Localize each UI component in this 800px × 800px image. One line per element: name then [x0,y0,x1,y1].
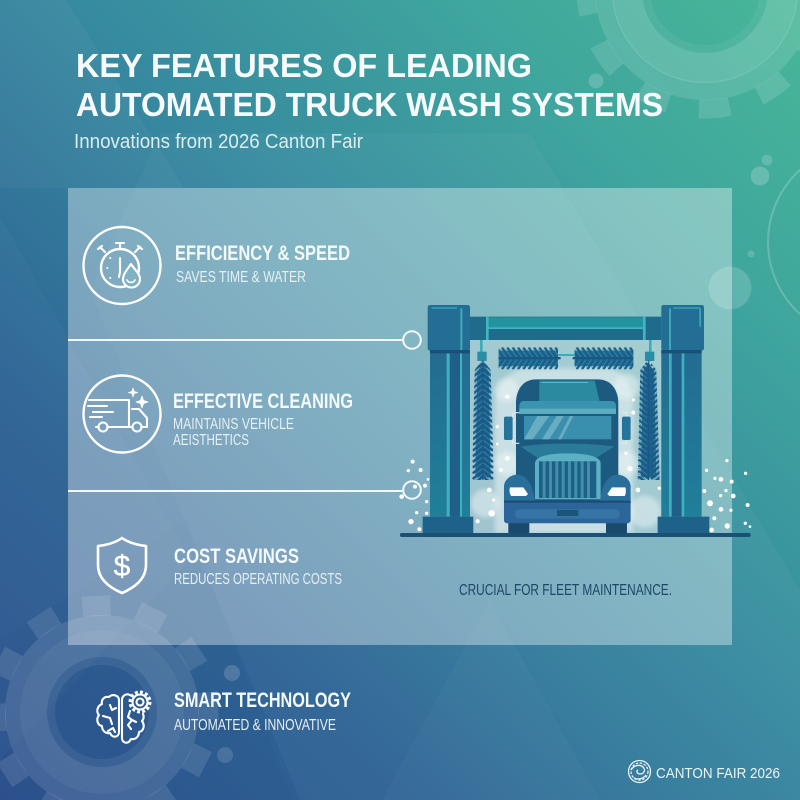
feature text: efficiency and speed: SAVES TIME & WATER [176,269,306,286]
feature text: effective cleaning: AEISTHETICS [173,432,249,449]
connector line 2 [68,481,421,499]
left pillar [423,305,473,533]
title: AUTOMATED TRUCK WASH SYSTEMS [76,86,663,123]
panel: features [68,188,732,645]
caption: CRUCIAL FOR FLEET MAINTENANCE. [459,582,672,599]
truck [504,379,631,534]
feature text: cost savings [174,545,342,588]
top beam [470,317,661,361]
icon: shield with dollar: $ [114,550,131,583]
ground line [400,533,751,537]
icon: moving truck [84,376,160,452]
feature text: cost savings: REDUCES OPERATING COSTS [174,571,342,588]
logo: Canton Fair 2026 [628,760,780,782]
right pillar [658,305,709,533]
top brushes [499,347,633,369]
feature text: effective cleaning [173,390,353,449]
water droplets [399,395,751,532]
feature text: smart technology: SMART TECHNOLOGY [174,689,351,712]
illustration: truck wash gantry [399,305,751,537]
feature text: smart technology [174,689,351,734]
feature text: smart technology: AUTOMATED & INNOVATIVE [174,717,336,734]
title [76,47,663,123]
connector line 1 [68,331,421,349]
decorative gear: top right [577,0,800,118]
decorative arc [767,168,800,316]
feature text: efficiency and speed [175,242,350,286]
icon: stopwatch and water drop [84,227,160,304]
decorative bubbles [217,74,772,763]
subtitle: Innovations from 2026 Canton Fair [74,131,363,153]
wash backdrop and foam [470,340,661,533]
feature text: efficiency and speed: EFFICIENCY & SPEED [175,242,350,265]
title: KEY FEATURES OF LEADING [76,47,532,84]
icon: brain with gear [97,692,150,743]
icon: shield with dollar [98,538,146,593]
feature text: cost savings: COST SAVINGS [174,545,299,568]
logo: Canton Fair 2026: CANTON FAIR 2026 [656,766,780,782]
decorative gear: bottom left [0,595,219,800]
feature text: effective cleaning: MAINTAINS VEHICLE [173,416,294,433]
feature text: effective cleaning: EFFECTIVE CLEANING [173,390,353,413]
side brushes [472,359,660,480]
